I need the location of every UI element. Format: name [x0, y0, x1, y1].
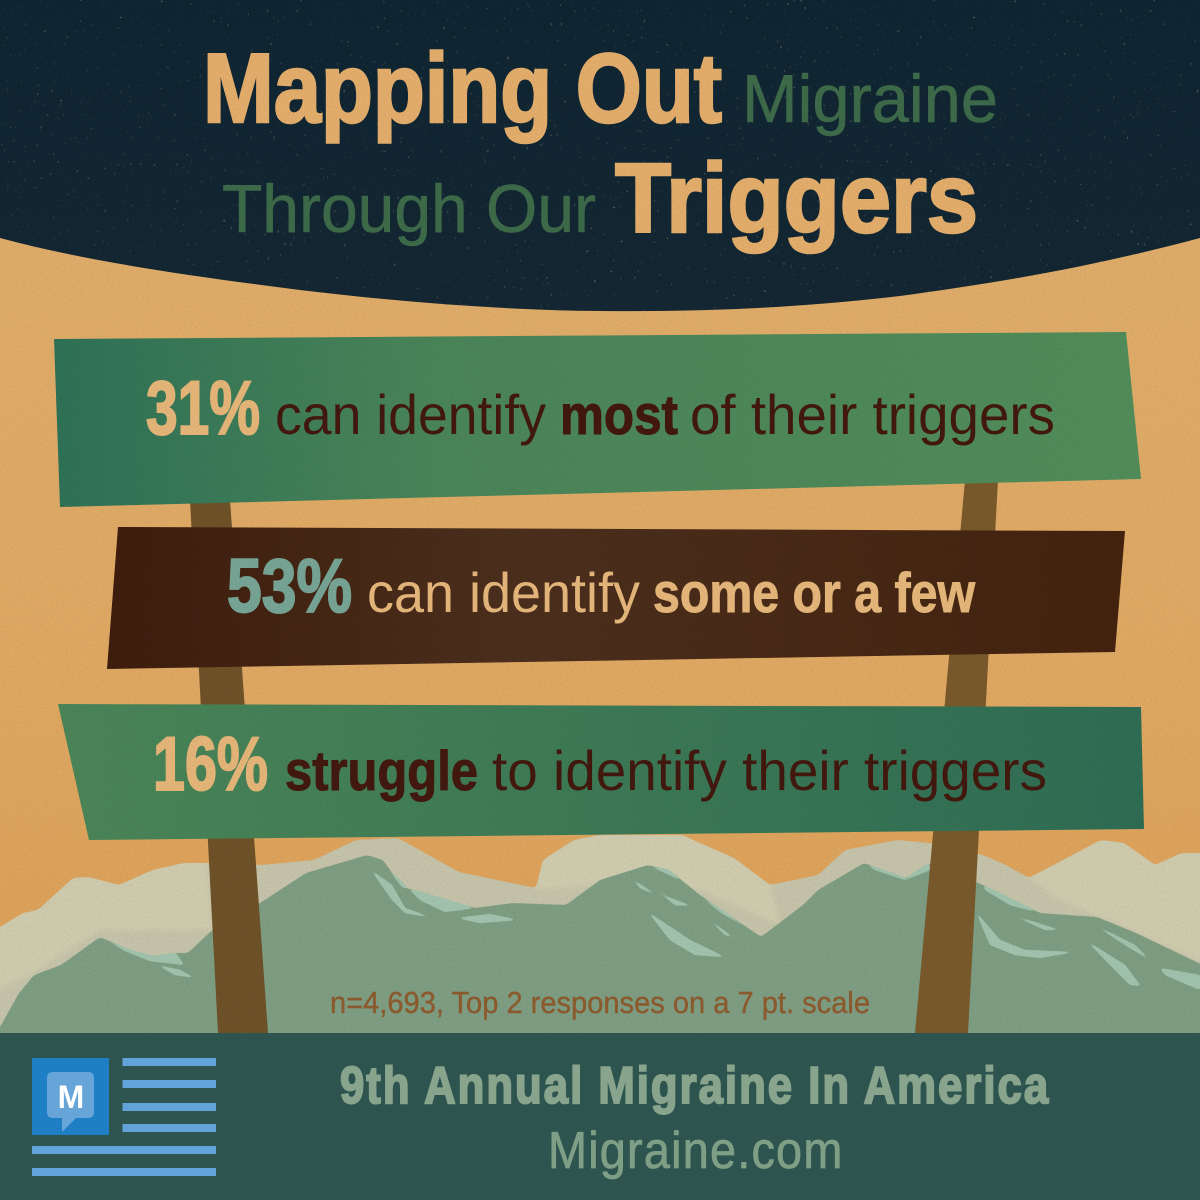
sign 2 text [227, 544, 975, 629]
sign: 53% [107, 527, 1125, 669]
title [203, 33, 998, 253]
background: night sky [0, 0, 1200, 311]
sign 1 text [146, 366, 1055, 451]
sign 2 text: can identify [367, 561, 640, 624]
footer band [0, 1033, 1200, 1200]
icon: speech bubble [47, 1072, 94, 1132]
sign 1 text: most [560, 383, 678, 446]
right signpost [915, 480, 998, 1033]
title line 2: Triggers [615, 143, 978, 253]
mountains: back ridge [0, 835, 1200, 1060]
sky specks [0, 0, 1200, 320]
sample size note: n=4,693, Top 2 responses on a 7 pt. scale [330, 985, 870, 1020]
logo letter: M [58, 1079, 84, 1115]
sign 3 text: struggle [285, 739, 478, 802]
sign 2 text: 53% [227, 544, 352, 629]
sign: 16% [58, 704, 1144, 840]
mountains: front ridge [0, 855, 1200, 1060]
sign 1 text: 31% [146, 366, 260, 451]
footer heading: 9th Annual Migraine In America [340, 1058, 1049, 1115]
footer website: Migraine.com [548, 1122, 842, 1180]
title line 1: Migraine [742, 61, 998, 137]
sign 2 text: some or a few [653, 561, 975, 624]
title line 2: Through Our [222, 171, 596, 247]
logo stripes [32, 1058, 216, 1176]
back ridge light patches [0, 835, 1200, 1000]
sign: 31% [54, 332, 1141, 507]
sign 1 text: of their triggers [690, 383, 1055, 446]
left signpost [190, 500, 268, 1033]
title line 1: Mapping Out [203, 33, 722, 143]
logo square [32, 1058, 109, 1135]
mountains: snow highlights [100, 863, 1200, 990]
sign 3 text: 16% [153, 722, 268, 807]
title line 2 [222, 143, 978, 253]
sign 3 text: to identify their triggers [492, 739, 1047, 802]
sign 3 text [153, 722, 1047, 807]
logo [32, 1058, 216, 1176]
sign 1 text: can identify [275, 383, 546, 446]
